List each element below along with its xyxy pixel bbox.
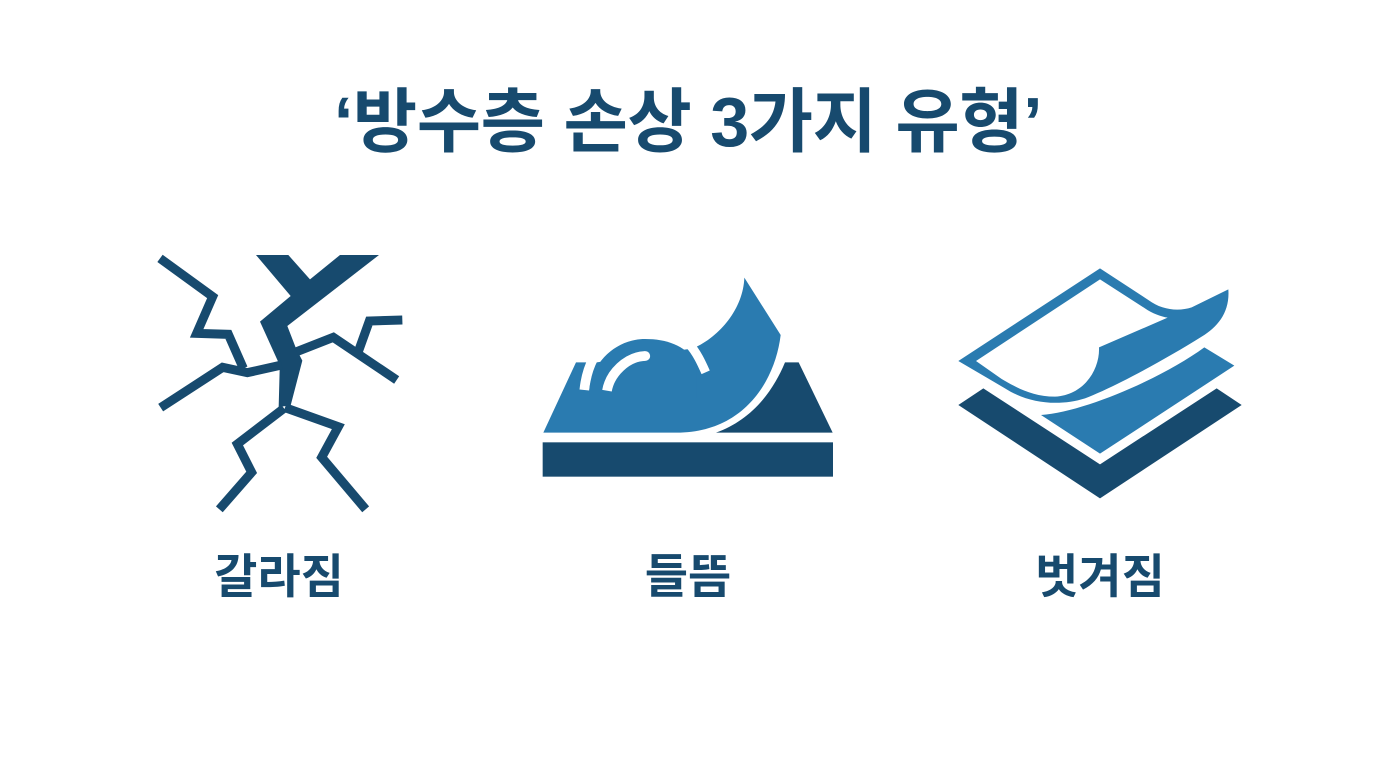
- label: peeling: 벗겨짐: [1035, 550, 1165, 603]
- icon: blister: [543, 278, 833, 477]
- icon: peeling: [958, 268, 1242, 498]
- label: crack: 갈라짐: [214, 550, 344, 603]
- icon: crack: [160, 255, 402, 509]
- label: blister: 들뜸: [645, 550, 731, 603]
- title: ‘방수층 손상 3가지 유형’: [334, 83, 1042, 161]
